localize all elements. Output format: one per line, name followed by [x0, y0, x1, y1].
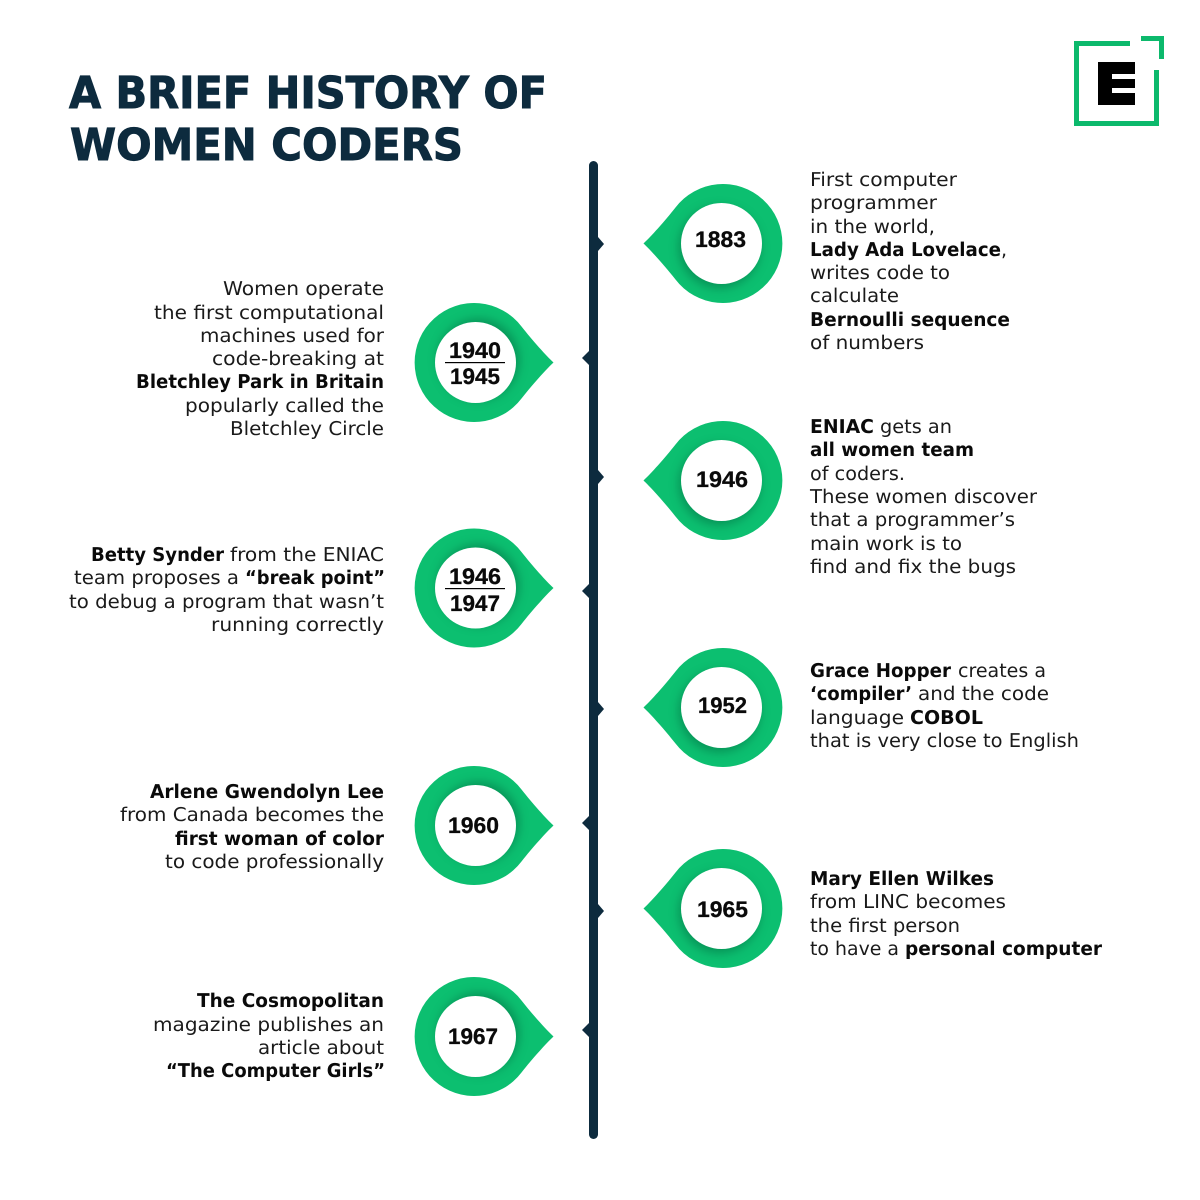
text: Grace Hopper: and the code	[918, 683, 1049, 705]
text: Arlene Gwendolyn Lee: from Canada becomes the	[120, 804, 384, 826]
text: Betty Synder: running correctly	[211, 614, 384, 636]
text: Bletchley Park	[136, 278, 384, 440]
text: Lady Ada Lovelace: First computer	[810, 169, 957, 191]
pin: 1946	[644, 421, 782, 540]
text: Bletchley Park: code-breaking at	[212, 348, 384, 370]
text: Betty Synder	[69, 544, 385, 636]
text: Mary Ellen Wilkes: from LINC becomes	[810, 891, 1006, 913]
title	[69, 68, 547, 171]
pin: 1883: 1883	[695, 227, 746, 252]
text: Bletchley Park: Women operate	[223, 278, 384, 300]
pin: 1946: 1946	[696, 467, 748, 492]
text: ENIAC: These women discover	[809, 486, 1037, 508]
text: Lady Ada Lovelace: programmer	[810, 192, 937, 214]
text: The Cosmopolitan	[153, 990, 385, 1082]
pin: 1967	[415, 977, 554, 1096]
event: 1946	[644, 416, 1037, 578]
pin: 1952: 1952	[698, 693, 747, 718]
pin: 1965	[644, 849, 782, 968]
pin: 1952	[644, 648, 782, 767]
pin: 1965: 1965	[697, 897, 748, 922]
text: Arlene Gwendolyn Lee	[120, 781, 385, 873]
pin: 1940-1945: 1945	[450, 364, 500, 389]
event: 1967	[153, 977, 554, 1096]
text: Mary Ellen Wilkes: to have a	[810, 938, 899, 960]
text: Mary Ellen Wilkes: Mary Ellen Wilkes	[810, 868, 994, 890]
title: A BRIEF HISTORY OF	[69, 68, 547, 119]
text: ENIAC: main work is to	[810, 533, 962, 555]
text: ENIAC: of coders.	[810, 463, 905, 485]
text: Lady Ada Lovelace: calculate	[810, 285, 899, 307]
text: ENIAC: all women team	[810, 439, 974, 461]
text: ENIAC: gets an	[880, 416, 952, 438]
text: Betty Synder: to debug a program that wasn’t	[69, 591, 384, 613]
text: Bletchley Park: Bletchley Park in Britain	[136, 371, 384, 393]
text: Mary Ellen Wilkes: the first person	[810, 915, 960, 937]
event: 1940-1945	[136, 278, 554, 440]
text: Arlene Gwendolyn Lee: first woman of color	[175, 828, 385, 850]
text: Grace Hopper: creates a	[958, 660, 1046, 682]
text: Grace Hopper: COBOL	[910, 707, 983, 729]
text: Betty Synder: from the ENIAC	[230, 544, 384, 566]
text: Grace Hopper: Grace Hopper	[810, 660, 952, 682]
text: Betty Synder: team proposes a	[74, 567, 239, 589]
text: Arlene Gwendolyn Lee: to code professionally	[165, 851, 384, 873]
event: 1965	[644, 849, 1103, 968]
title: WOMEN CODERS	[70, 120, 463, 171]
text: Mary Ellen Wilkes	[810, 868, 1103, 960]
text: Betty Synder: Betty Synder	[91, 544, 225, 566]
pin: 1946-1947: 1946	[449, 564, 501, 589]
text: Bletchley Park: machines used for	[200, 325, 384, 347]
text: The Cosmopolitan: magazine publishes an	[153, 1014, 384, 1036]
pin: 1946-1947	[415, 528, 554, 648]
event: 1960	[120, 766, 554, 885]
text: Bletchley Park: Bletchley Circle	[230, 418, 384, 440]
text: Grace Hopper: language	[810, 707, 904, 729]
pin: 1960	[415, 766, 554, 885]
pin: 1883	[644, 184, 782, 303]
text: Lady Ada Lovelace: in the world,	[810, 216, 935, 238]
pin: 1940-1945	[415, 303, 554, 422]
text: Lady Ada Lovelace: of numbers	[810, 332, 924, 354]
text: Lady Ada Lovelace: writes code to	[810, 262, 950, 284]
text: Grace Hopper	[810, 660, 1079, 752]
text: ENIAC: ENIAC	[810, 416, 874, 438]
pin: 1967: 1967	[448, 1024, 498, 1049]
text: Bletchley Park: popularly called the	[185, 395, 384, 417]
text: Lady Ada Lovelace: Lady Ada Lovelace	[810, 239, 1001, 261]
text: Lady Ada Lovelace: ,	[1001, 239, 1007, 261]
icon: E logo	[1076, 38, 1162, 124]
text: Lady Ada Lovelace: Bernoulli sequence	[810, 309, 1010, 331]
text: ENIAC: find and fix the bugs	[810, 556, 1016, 578]
text: Lady Ada Lovelace	[810, 169, 1010, 354]
text: Arlene Gwendolyn Lee: Arlene Gwendolyn Lee	[150, 781, 384, 803]
text: ENIAC	[809, 416, 1037, 578]
text: Bletchley Park: the first computational	[154, 302, 384, 324]
text: Grace Hopper: ‘compiler’	[810, 683, 912, 705]
text: The Cosmopolitan: The Cosmopolitan	[197, 990, 384, 1012]
text: ENIAC: that a programmer’s	[810, 509, 1015, 531]
text: The Cosmopolitan: “The Computer Girls”	[166, 1060, 385, 1082]
text: Grace Hopper: that is very close to English	[810, 730, 1079, 752]
pin: 1960: 1960	[448, 813, 499, 838]
text: The Cosmopolitan: article about	[258, 1037, 384, 1059]
text: Betty Synder: “break point”	[245, 567, 385, 589]
timeline spine	[582, 161, 604, 1139]
pin: 1946-1947: 1947	[450, 591, 500, 616]
event: 1952	[644, 648, 1079, 767]
text: Mary Ellen Wilkes: personal computer	[905, 938, 1103, 960]
event: 1883	[644, 169, 1010, 354]
pin: 1940-1945: 1940	[449, 338, 501, 363]
event: 1946-1947	[69, 528, 554, 648]
